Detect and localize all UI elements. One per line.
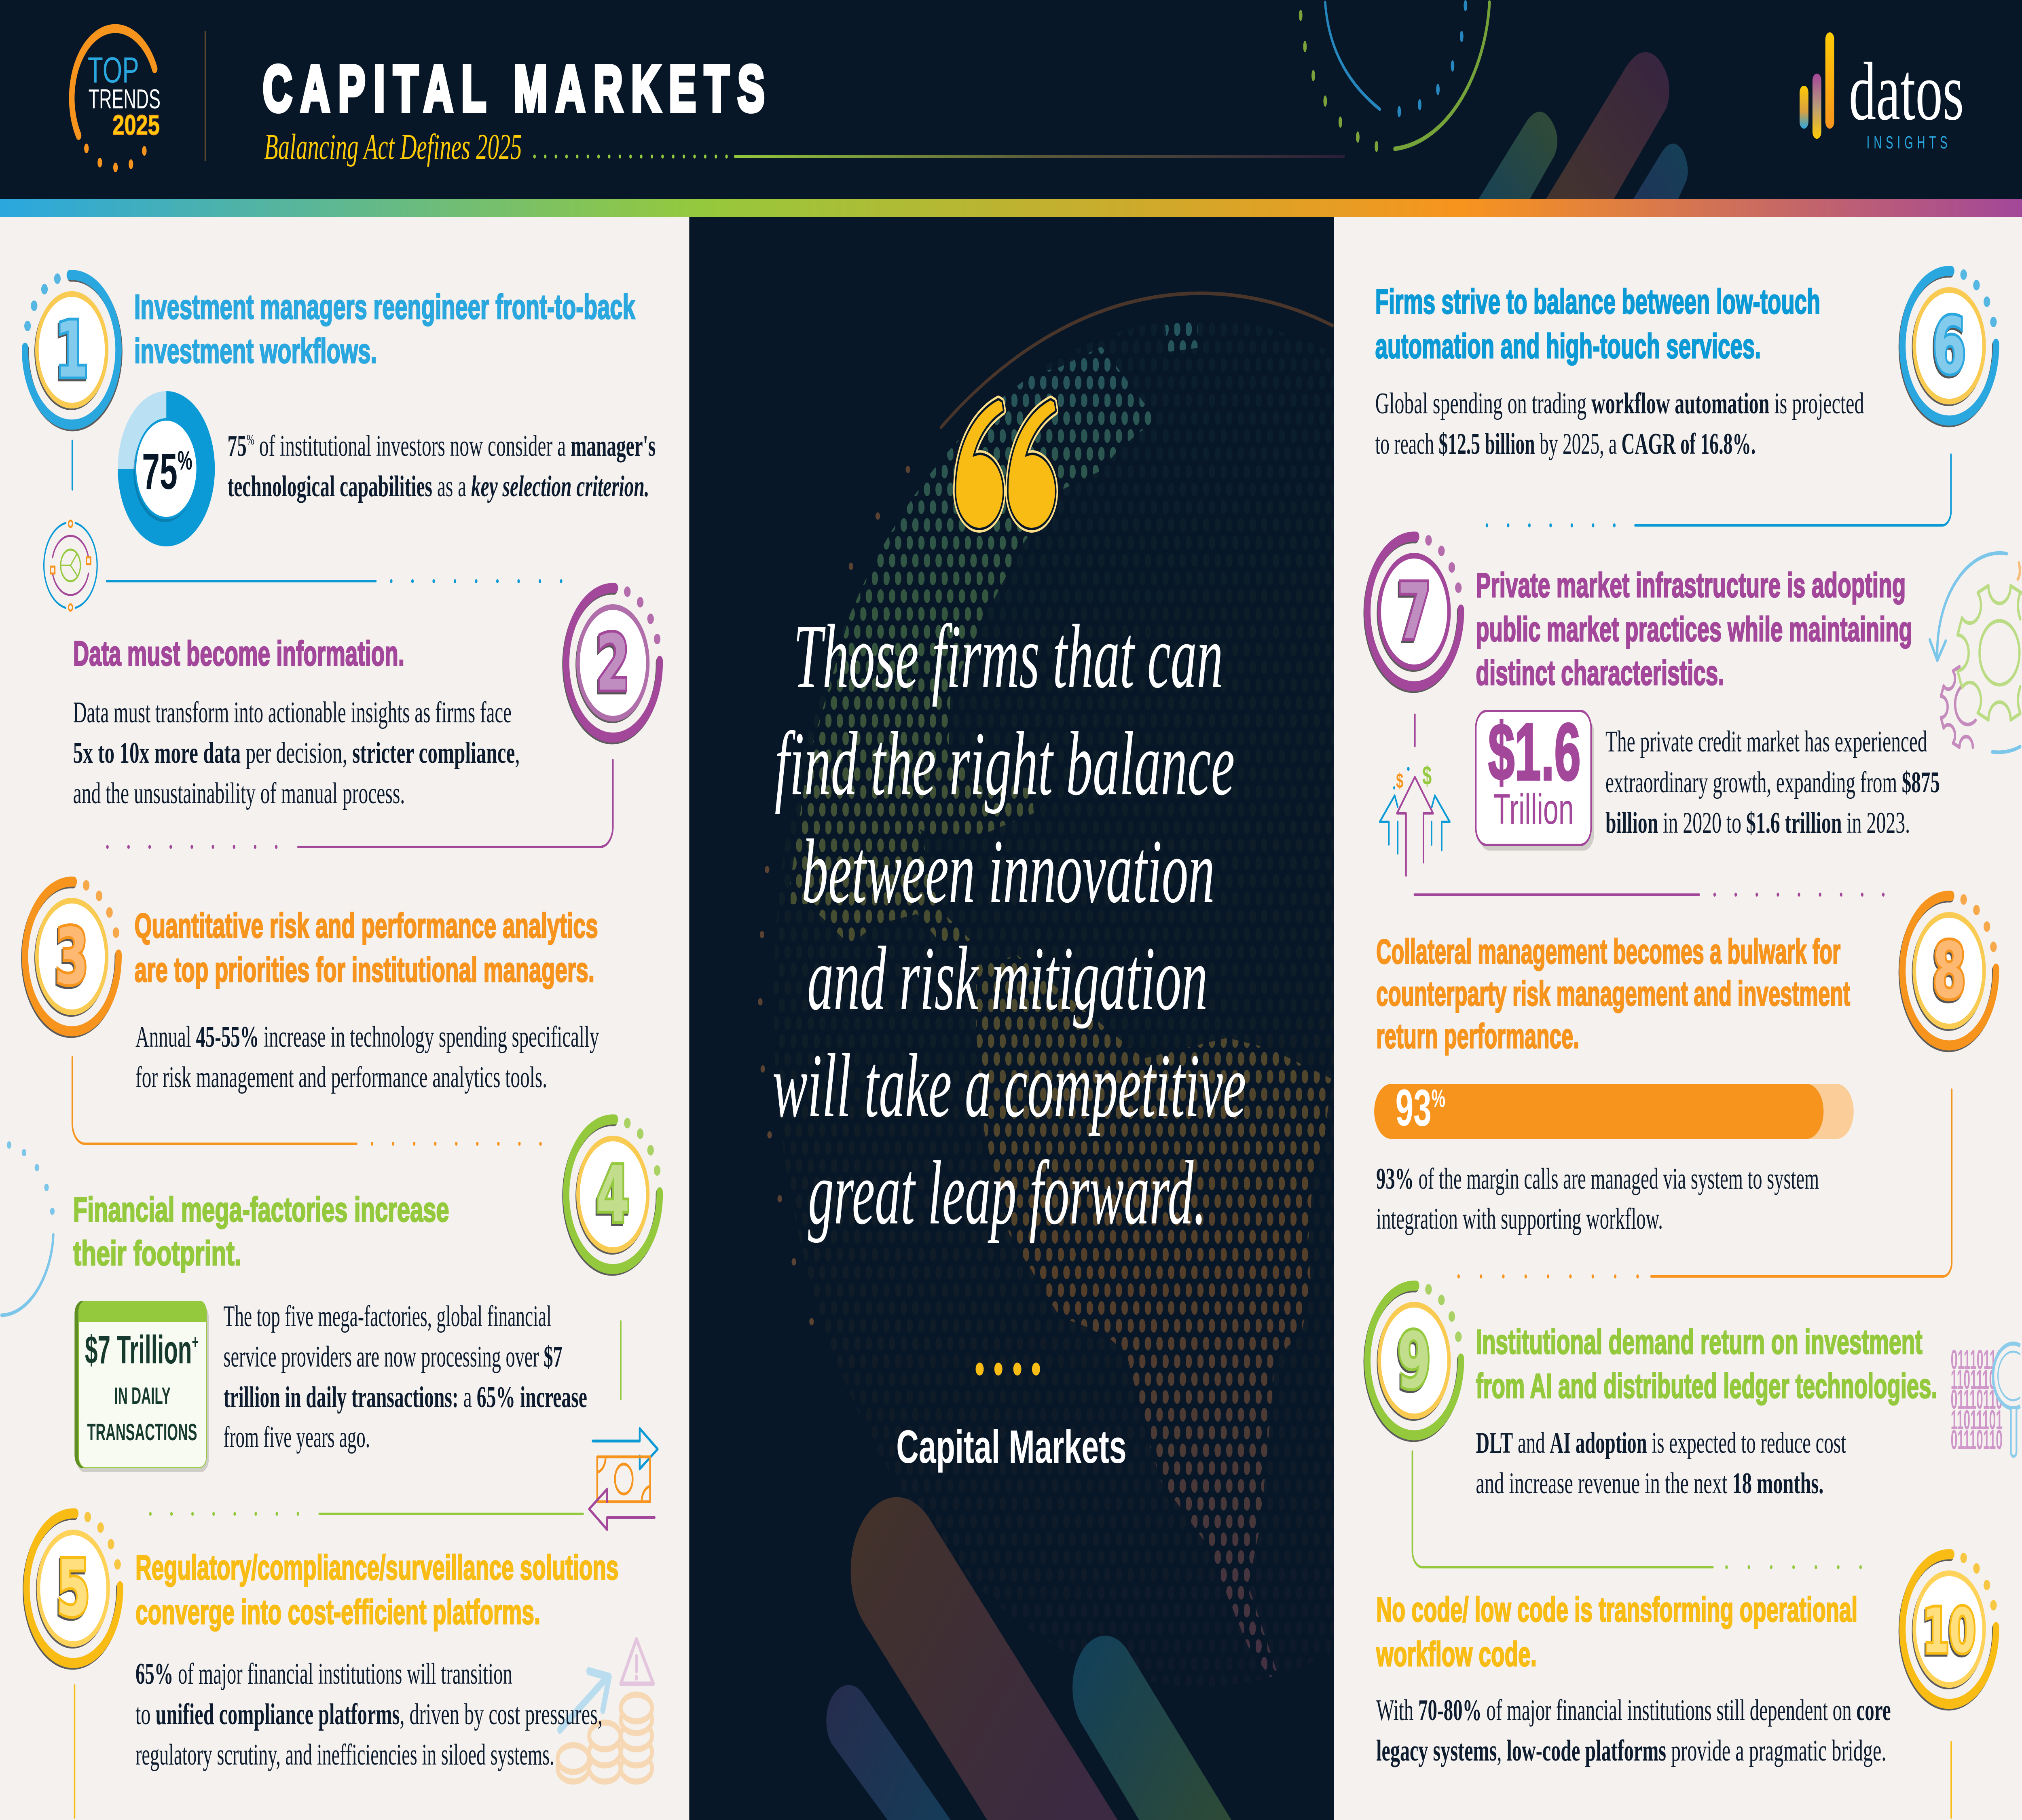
body 9: DLT and AI adoption is expected to reduce cost [1476,1426,1846,1460]
icon: rising arrows: $ [1422,760,1432,790]
body 9 [1476,1426,1846,1500]
stat card: $1.6 Trillion: Trillion [1493,785,1574,833]
badge 3: 3 [55,912,89,1002]
quote separator dots [975,1363,1040,1376]
divider 7 [1415,893,1884,896]
heading 1: Investment managers reengineer front-to-back [134,288,635,326]
heading 5: converge into cost-efficient platforms. [135,1593,540,1632]
logo: datos insights [1800,32,1964,152]
progress bar 93%: % [1432,1084,1445,1112]
icon: faded compliance coins, arrow and warning [558,1639,654,1782]
body 2: 5x to 10x more data per decision, stricter compliance , [73,736,520,770]
dotted rule [535,155,1345,158]
icon: orbit pie chart [44,521,97,611]
dotted globe [758,291,1334,1678]
panel: trend 10 [1376,1553,1997,1818]
badge 5 [26,1512,121,1665]
body 4 [223,1300,587,1454]
heading 9: from AI and distributed ledger technologies. [1476,1367,1937,1405]
quote text: find the right balance [775,713,1235,814]
stat card: $1.6 Trillion [1476,707,1594,851]
badge 4 [565,1118,660,1271]
donut chart 75%: % [178,445,192,475]
connector 6 [1487,455,1951,525]
quote text: between innovation [802,821,1215,922]
decoration: blue dotted arc [2,1141,55,1315]
heading 4 [73,1191,449,1273]
quote attribution: Capital Markets [896,1421,1127,1473]
logo: Top Trends 2025 [72,29,161,172]
panel: trend 5 [26,1512,654,1818]
heading 1 [134,288,635,370]
heading 9 [1476,1323,1937,1405]
heading 8: Collateral management becomes a bulwark for [1376,933,1840,971]
body 5 [135,1657,603,1771]
body 5: regulatory scrutiny, and inefficiencies in siloed systems. [135,1738,554,1771]
subtitle: Balancing Act Defines 2025 [264,127,522,167]
heading 8 [1376,933,1850,1056]
progress bar 93%: 93 [1396,1079,1432,1137]
heading 6: Firms strive to balance between low-touch [1375,283,1820,321]
badge 8 [1902,894,1997,1047]
stat card: $7 Trillion: TRANSACTIONS [87,1419,197,1445]
body 7: extraordinary growth, expanding from $875 [1605,766,1940,799]
badge 2 [565,586,660,739]
body 5: to unified compliance platforms , driven by cost pressures, [135,1698,603,1731]
body 10: legacy systems, low-code platforms provide a pragmatic bridge. [1376,1734,1886,1767]
badge 10 [1902,1553,1997,1706]
heading 4: Financial mega-factories increase [73,1191,449,1229]
heading 4: their footprint. [73,1234,241,1273]
connector 4 [620,1321,622,1399]
icon: binary magnifier: 01110111 [1951,1345,2003,1376]
badge 8: 8 [1933,927,1966,1016]
heading 7: public market practices while maintaining [1476,610,1912,649]
body 6: to reach $12.5 billion by 2025, a CAGR of 16.8%. [1375,427,1756,461]
heading 7: Private market infrastructure is adopting [1476,566,1906,605]
connector 1 [71,441,74,489]
logo: datos insights: datos [1849,46,1964,137]
stat card: $7 Trillion: IN DAILY [114,1383,171,1409]
quote text: will take a competitive [772,1035,1246,1136]
heading 3: are top priorities for institutional managers. [134,951,594,989]
title: CAPITAL MARKETS [263,53,765,125]
body 7: billion in 2020 to $1.6 trillion in 2023. [1605,806,1910,840]
panel: trend 1 [24,273,656,611]
body 8: 93% of the margin calls are managed via system to system [1376,1162,1819,1196]
heading 7: distinct characteristics. [1476,654,1724,692]
heading 8: counterparty risk management and investment [1376,975,1850,1013]
connector 10 [1950,1742,1952,1818]
progress bar 93% [1374,1079,1854,1139]
connector 9 [1412,1452,1861,1567]
panel: trend 6 [1375,269,1997,525]
heading 3 [134,907,598,989]
body 2 [73,696,520,810]
badge 4: 4 [596,1150,630,1240]
body 5: 65% of major financial institutions will transition [135,1657,512,1691]
badge 3 [24,880,119,1033]
stat card: $7 Trillion [74,1301,209,1472]
panel: centre quote [689,217,1334,1820]
heading 10: No code/ low code is transforming operational [1376,1591,1857,1629]
badge 2: 2 [596,619,630,708]
panel: trend 2 [73,586,660,847]
body 8 [1376,1162,1819,1236]
heading 10: workflow code. [1376,1635,1537,1674]
panel: trend 3 [24,880,599,1144]
body 4: The top five mega-factories, global financial [223,1300,552,1333]
icon: rising arrows: $ [1396,769,1403,793]
donut chart 75%: 75 [142,443,178,500]
badge 6 [1902,269,1997,422]
body 1: 75 [227,430,247,463]
stat card: $7 Trillion: $7 Trillion [85,1328,201,1372]
body 10: With 70-80% of major financial institutions still dependent on core [1376,1694,1891,1727]
heading 6: automation and high-touch services. [1375,327,1761,366]
body 4: trillion in daily transactions: a 65% increase [223,1381,587,1414]
icon: binary magnifier [1951,1344,2020,1456]
body 3: Annual 45-55% increase in technology spending specifically [135,1020,599,1054]
body 4: from five years ago. [223,1421,370,1454]
badge 9: 9 [1398,1316,1431,1406]
logo: Top Trends 2025: TRENDS [89,84,161,115]
badge 7 [1366,535,1462,688]
body 7: The private credit market has experienced [1605,725,1927,758]
body 4: service providers are now processing over $7 [223,1340,563,1373]
heading 7 [1476,566,1912,692]
body 1: manager's [571,430,656,463]
body 3: for risk management and performance analytics tools. [135,1061,547,1094]
body 10 [1376,1694,1891,1767]
body 6 [1375,387,1864,461]
connector 2 [108,760,613,847]
quote text: great leap forward. [808,1142,1206,1243]
logo: Top Trends 2025: 2025 [112,110,160,141]
panel: trend 8 [1374,894,1997,1276]
decorative arcs [1299,0,1489,152]
heading 9: Institutional demand return on investment [1476,1323,1923,1361]
divider 1 [107,580,563,582]
body 8: integration with supporting workflow. [1376,1202,1663,1236]
badge 9 [1366,1284,1462,1437]
icon: quotation mark [956,400,1055,528]
body 6: Global spending on trading workflow automation is projected [1375,387,1864,420]
connector 8 [1459,1090,1952,1276]
badge 10: 10 [1923,1596,1975,1666]
badge 1 [24,273,119,426]
heading 6 [1375,283,1820,366]
body 3 [135,1020,599,1094]
panel: trend 7 [1366,535,2021,895]
body 7 [1605,725,1940,840]
badge 7: 7 [1398,567,1431,657]
heading 5 [135,1549,618,1632]
body 9: and increase revenue in the next 18 months. [1476,1467,1823,1500]
quote text: Those firms that can [793,606,1223,707]
quote text [772,606,1246,1243]
heading 8: return performance. [1376,1017,1579,1056]
panel: trend 9 [1366,1284,2020,1567]
heading 1: investment workflows. [134,332,377,370]
icon: money exchange arrows [589,1428,658,1530]
heading 10 [1376,1591,1857,1674]
heading 5: Regulatory/compliance/surveillance solutions [135,1549,618,1587]
body 1: technological capabilities as a key selection criterion. [227,470,649,503]
icon: rising arrows [1380,760,1450,876]
heading 3: Quantitative risk and performance analytics [134,907,598,945]
rainbow gradient bar [0,199,2022,217]
badge 6: 6 [1933,302,1966,391]
badge 1: 1 [55,306,89,395]
badge 5: 5 [57,1544,90,1634]
header band [0,0,2022,199]
decorative slanted pills [1478,52,1688,199]
connector 7 [1414,715,1416,746]
body 2: and the unsustainability of manual process. [73,777,405,810]
divider 4 [150,1513,583,1515]
body 1 [227,430,656,503]
icon: gears [1930,553,2021,752]
logo: datos insights: INSIGHTS [1867,132,1948,152]
stat card: $1.6 Trillion: $1.6 [1488,707,1581,797]
stat card: $7 Trillion: + [192,1330,199,1353]
connector 5 [73,1685,76,1818]
heading 2: Data must become information. [73,635,404,673]
body 2: Data must transform into actionable insights as firms face [73,696,512,729]
logo: Top Trends 2025: TOP [88,49,139,90]
bottom slanted pills [826,1497,1231,1820]
body 1: of institutional investors now consider a [254,430,571,463]
connector 3 [72,1057,541,1144]
donut chart 75% [127,405,206,532]
quote text: and risk mitigation [807,928,1208,1029]
panel: trend 4 [73,1118,660,1530]
body 1: % [247,432,254,448]
